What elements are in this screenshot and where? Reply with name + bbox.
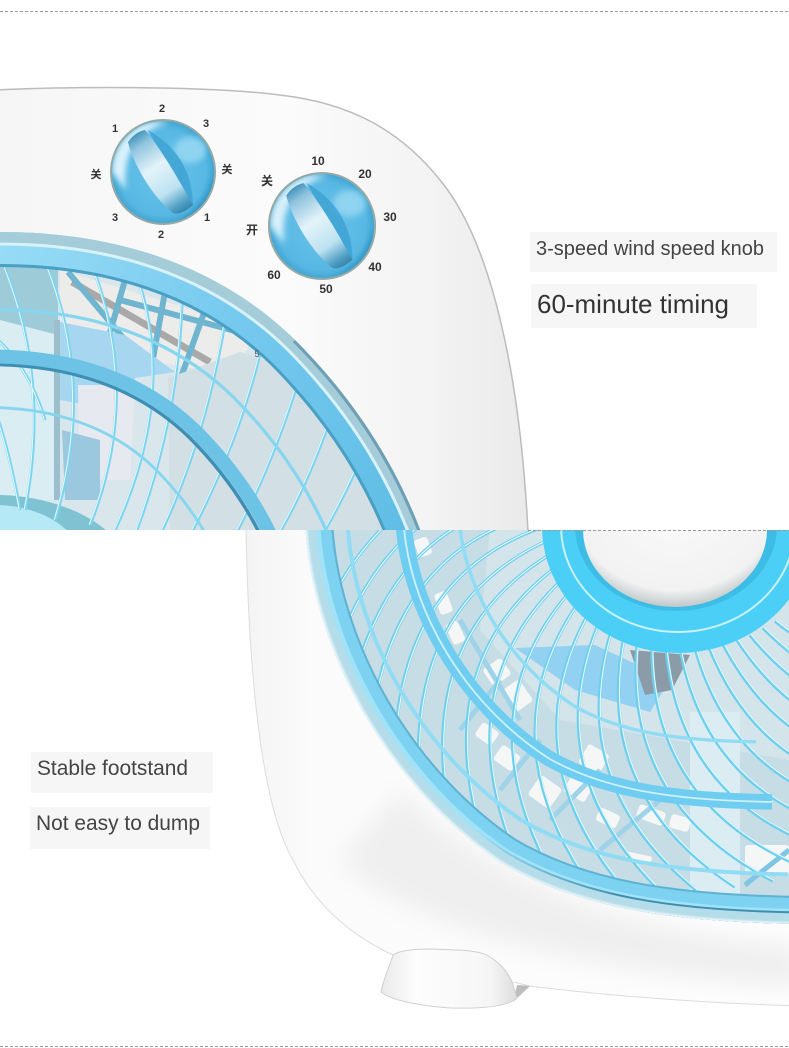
panel: control knobs close-up — [0, 86, 529, 530]
knob labels: timer: 10 — [311, 154, 325, 168]
outer blue ring upper — [0, 232, 424, 540]
feature label: stability: Not easy to dump — [36, 812, 200, 835]
knob labels: timer: 30 — [383, 210, 397, 224]
inner blue ring upper — [0, 350, 276, 530]
fan grille lower — [306, 530, 789, 924]
fan grille upper — [0, 232, 420, 530]
feature label: timing — [531, 284, 757, 328]
knob labels: timer: 20 — [358, 167, 372, 181]
knob: timer — [269, 173, 380, 280]
knob labels: speed: 3 — [203, 118, 209, 130]
wire rings upper — [0, 308, 328, 530]
white gaps between blades — [413, 536, 789, 875]
feature label: stability — [30, 807, 210, 849]
panel: footstand close-up — [246, 530, 789, 1009]
foot stand — [381, 949, 530, 1008]
stray mark: 5 — [254, 349, 260, 359]
white hub cap — [583, 530, 767, 607]
knob labels: timer: 开 — [246, 223, 258, 237]
feature label: footstand — [31, 752, 213, 793]
feature label: timing: 60-minute timing — [537, 289, 729, 319]
knob labels: speed: 2 — [158, 229, 164, 241]
knob labels: speed: 关 — [90, 167, 102, 181]
knob labels: speed: 1 — [204, 212, 210, 224]
outer blue ring lower — [305, 520, 789, 924]
feature label: footstand: Stable footstand — [37, 757, 188, 780]
motor and blade parts — [515, 645, 670, 712]
knob labels: speed — [90, 103, 232, 241]
spiral wires lower — [341, 530, 789, 890]
wire highlights lower — [342, 530, 789, 890]
fan body upper — [0, 88, 528, 532]
feature label: wind speed: 3-speed wind speed knob — [536, 238, 764, 260]
knob labels: timer — [246, 154, 397, 296]
knob labels: speed: 3 — [112, 212, 118, 224]
knob labels: timer: 50 — [319, 282, 333, 296]
spiral wires upper — [0, 268, 358, 535]
feature label: wind speed — [530, 232, 777, 272]
knob labels: timer: 60 — [267, 268, 281, 282]
wire rings lower — [347, 516, 788, 874]
knob labels: speed: 1 — [112, 123, 118, 135]
grille interior behind wires — [0, 232, 420, 530]
knob: wind speed — [111, 120, 220, 225]
knob labels: timer: 40 — [368, 260, 382, 274]
fan body lower — [246, 525, 789, 1006]
inner blue ring lower — [403, 517, 772, 802]
wire highlights upper — [0, 268, 357, 535]
grille interior lower — [306, 530, 789, 924]
body shading — [354, 804, 789, 982]
hub blue ring — [542, 530, 789, 653]
knob labels: timer: 关 — [261, 173, 273, 188]
knob labels: speed: 2 — [159, 103, 165, 115]
knob labels: speed: 关 — [222, 162, 232, 176]
